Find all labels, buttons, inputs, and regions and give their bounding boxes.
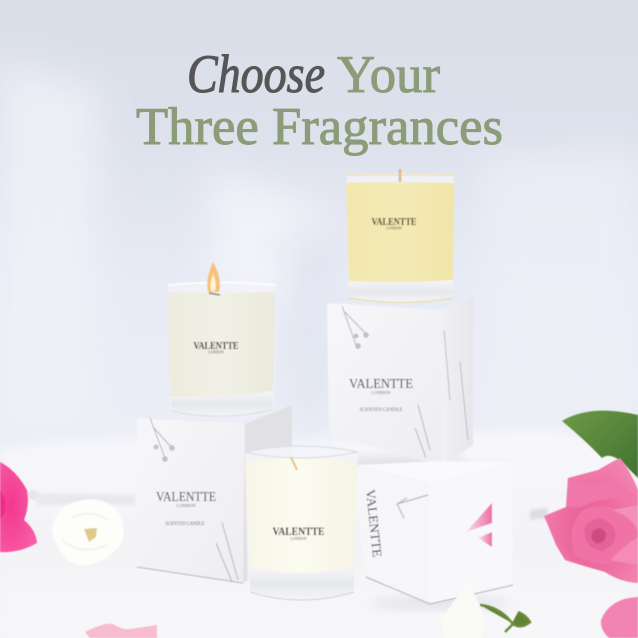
box: right lower box [357,461,513,608]
icon: flame [207,262,220,292]
box side label: VALENTTE [363,489,385,558]
box label: VALENTTE [156,490,216,505]
box illustration: sprig [342,306,468,458]
box label: VALENTTE [349,377,413,392]
icon: wick [399,169,401,182]
box: left lower box [137,405,292,583]
candle label: LONDON [208,350,224,354]
box illustration: sprig and pink reflection [397,495,492,547]
box label: SCENTED CANDLE [166,522,205,527]
icon: wick [291,457,297,470]
candle label: LONDON [290,537,307,541]
box label: LONDON [372,390,391,395]
box: top stacked box [327,296,473,473]
candle label [272,526,325,541]
title: Three Fragrances [136,98,503,156]
title: Choose [187,44,325,104]
candle: yellow candle [346,169,454,303]
box label [156,490,216,527]
candle label: VALENTTE [272,526,325,538]
white textured cloth surface [0,430,638,638]
flower: petal right bottom [601,597,638,638]
title: Your [337,46,440,104]
flower: pink rose right [544,458,638,583]
title [136,44,503,156]
candle: burning white candle [168,262,275,418]
grey folds behind flowers [36,493,548,520]
candle label: LONDON [386,226,402,230]
box label [349,377,413,413]
candle label: VALENTTE [194,341,239,352]
box label: SCENTED CANDLE [360,408,403,413]
candle: front white candle [245,446,358,601]
candle label: VALENTTE [372,217,417,228]
flower: pink rose left [0,462,37,552]
flower: petal bottom left [85,624,157,638]
box illustration: sprig [150,418,238,582]
box label: LONDON [176,503,196,508]
flower: white peony [52,499,124,566]
flower: green leaf right [562,411,638,478]
flower: small bud behind peony [28,490,38,500]
flower: white blossom bottom with stem [441,583,530,638]
